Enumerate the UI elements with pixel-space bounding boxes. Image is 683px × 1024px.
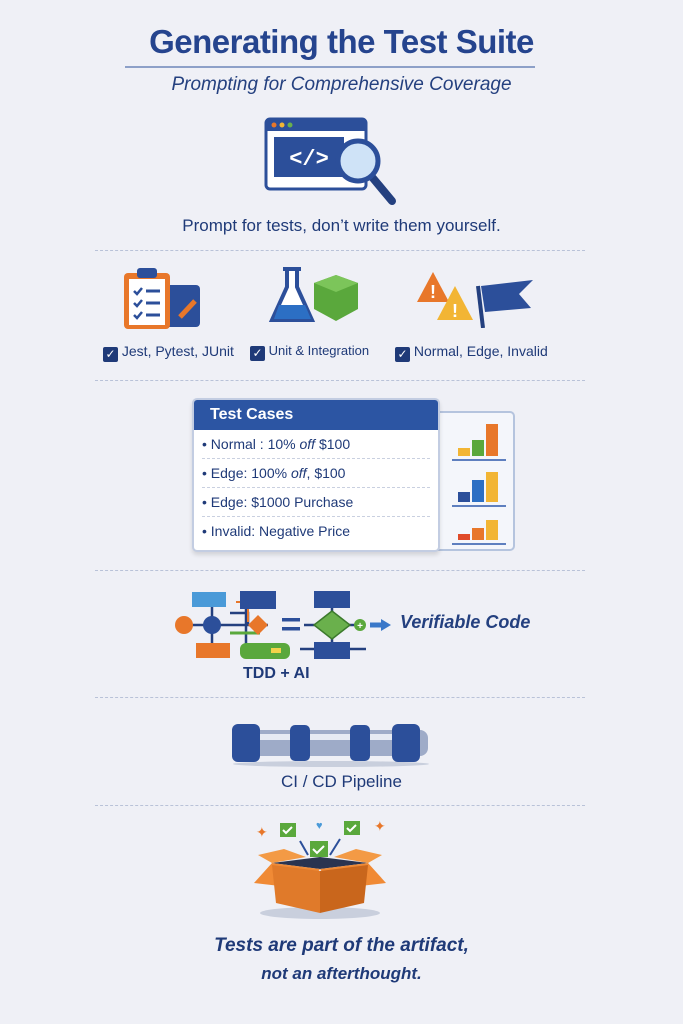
text: ci/cd: CI / CD Pipeline	[281, 772, 402, 791]
icon: warnings and flag: !	[452, 301, 458, 321]
labels row	[103, 343, 548, 362]
panel: test cases	[192, 398, 440, 552]
closing message: not an afterthought.	[261, 964, 422, 983]
test case list: • Invalid: Negative Price	[202, 523, 350, 539]
side chart panel	[438, 411, 515, 551]
icon: code window with magnifier: </>	[289, 147, 329, 172]
text: verifiable code: Verifiable Code	[400, 612, 530, 632]
test case list: • Normal : 10% off $100	[202, 436, 350, 452]
subtitle: Prompting for Comprehensive Coverage	[171, 74, 512, 95]
icon: open box with checks	[254, 818, 386, 919]
test case list: • Edge: 100% off, $100	[202, 465, 345, 481]
test case list	[202, 436, 430, 539]
icon: open box with checks: ♥	[316, 820, 323, 832]
icon: warnings and flag: !	[430, 282, 436, 302]
icon: pipeline	[232, 724, 429, 767]
label: unit: ✓	[252, 346, 263, 360]
flowchart diagram	[175, 591, 391, 659]
label: frameworks: ✓	[105, 347, 116, 361]
label: unit: Unit & Integration	[269, 343, 369, 358]
closing message	[214, 935, 469, 983]
label: normal edge: ✓	[397, 347, 408, 361]
closing message: Tests are part of the artifact,	[214, 935, 469, 956]
icon: flask and cube	[268, 267, 358, 322]
tagline: Prompt for tests, don’t write them yourself.	[182, 216, 501, 235]
label: normal edge: Normal, Edge, Invalid	[414, 343, 548, 359]
title: Generating the Test Suite	[149, 23, 534, 60]
icon: warnings and flag	[417, 272, 533, 328]
icon: code window with magnifier	[264, 118, 396, 205]
test case list: • Edge: $1000 Purchase	[202, 494, 353, 510]
label: frameworks: Jest, Pytest, JUnit	[122, 343, 234, 359]
icon: open box with checks: ✦	[374, 818, 386, 834]
icon: clipboard	[124, 268, 200, 329]
panel header: Test Cases	[210, 406, 293, 423]
flowchart diagram: +	[357, 621, 363, 632]
text: TDD + AI: TDD + AI	[243, 665, 310, 682]
panel header	[194, 400, 438, 430]
icon: open box with checks: ✦	[256, 824, 268, 840]
